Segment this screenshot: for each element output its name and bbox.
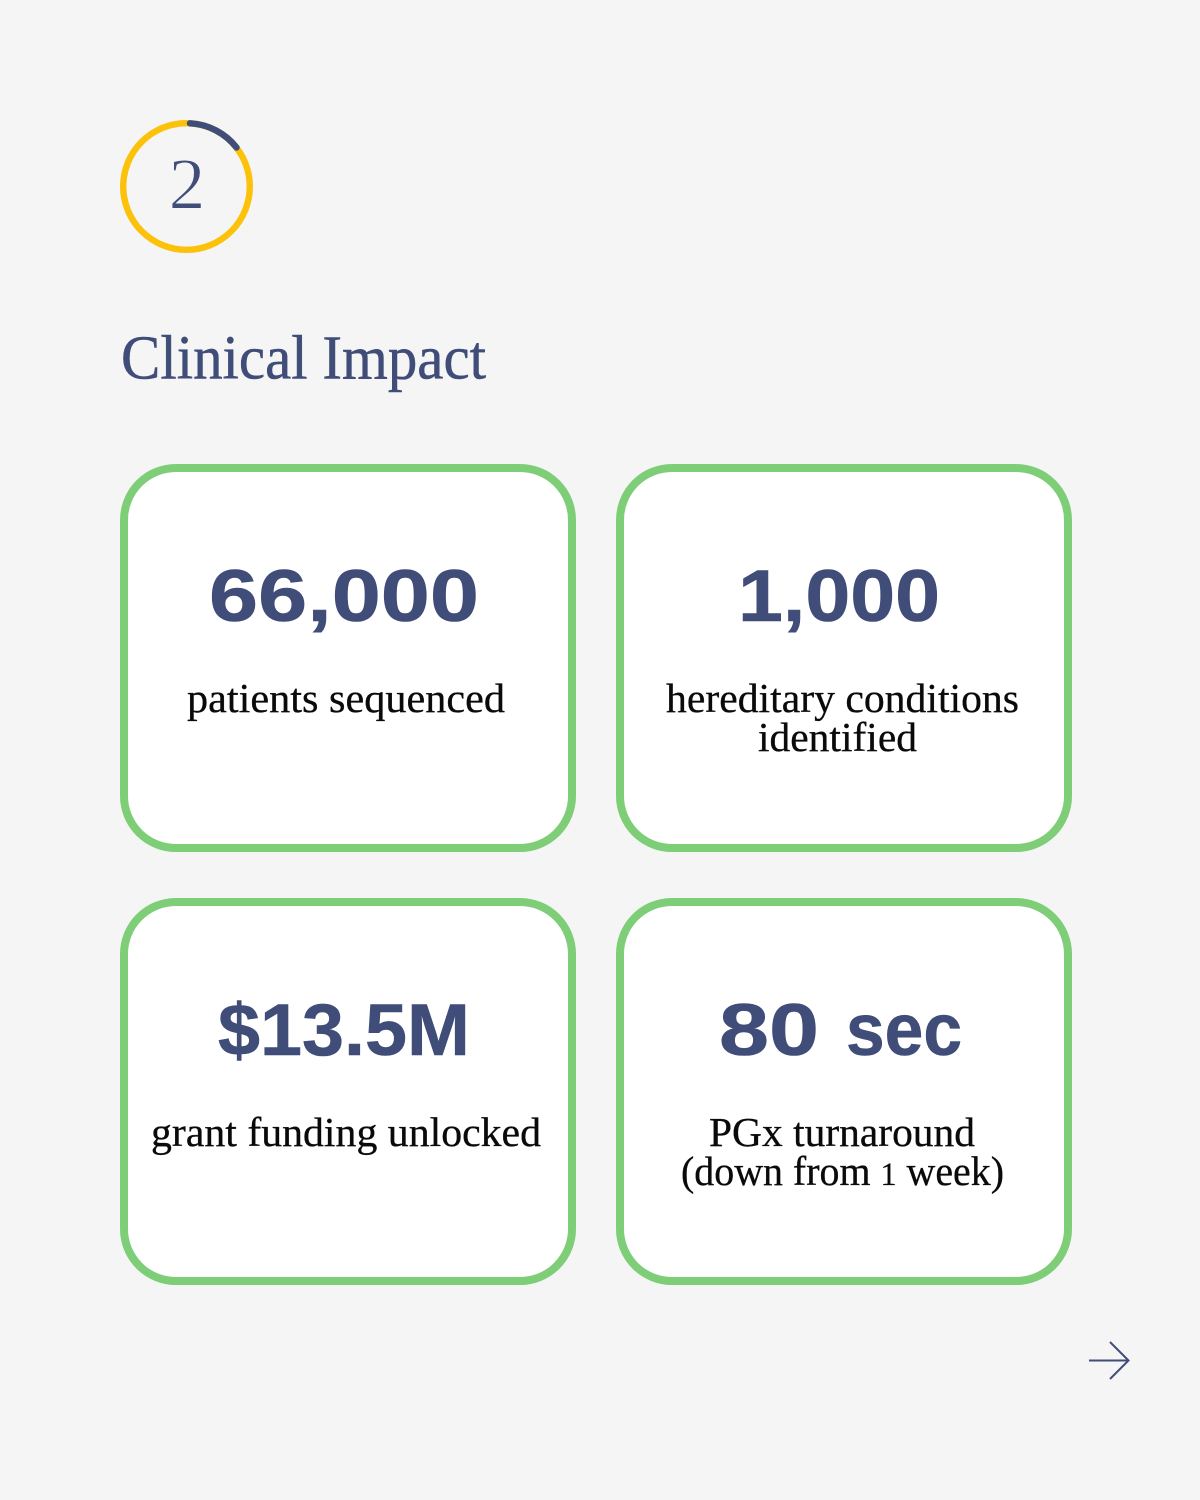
icon: next arrow: [1089, 1342, 1128, 1379]
panel: PGx turnaround: (down from 1 week): [681, 1148, 1004, 1194]
panel: patients sequenced: patients sequenced: [187, 675, 505, 721]
panel: hereditary conditions identified: [620, 468, 1068, 848]
panel: PGx turnaround: 80: [719, 990, 819, 1071]
panel: hereditary conditions identified: 1,000: [738, 556, 940, 637]
panel: grant funding unlocked: [124, 902, 572, 1281]
panel: patients sequenced: [124, 468, 572, 848]
step number badge: 2: [169, 144, 205, 224]
title: Clinical Impact: [121, 324, 486, 392]
panel: PGx turnaround: PGx turnaround: [709, 1109, 975, 1155]
panel: hereditary conditions identified: hereditary conditions: [666, 675, 1019, 721]
panel: patients sequenced: 66,000: [209, 556, 479, 637]
panel: grant funding unlocked: grant funding unlocked: [151, 1109, 541, 1155]
panel: hereditary conditions identified: identified: [758, 714, 917, 760]
panel: PGx turnaround: [620, 902, 1068, 1281]
panel: PGx turnaround: sec: [846, 990, 962, 1071]
step number badge: [123, 123, 250, 250]
panel: grant funding unlocked: $13.5M: [218, 990, 470, 1071]
